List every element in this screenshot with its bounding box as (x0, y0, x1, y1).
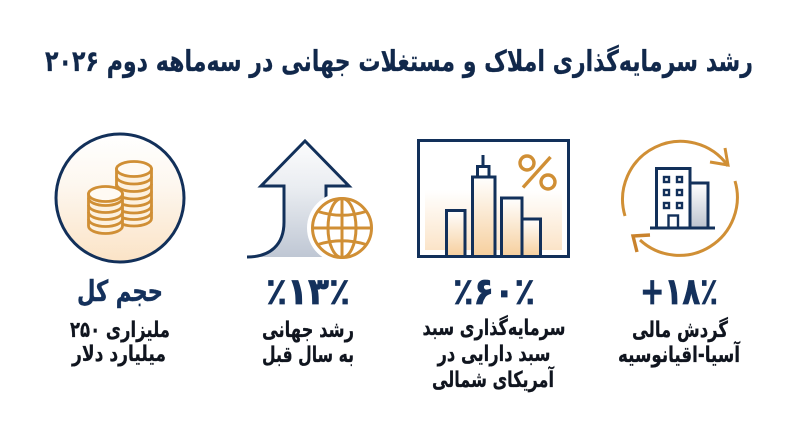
text: total volume description (70, 318, 170, 367)
icon: up arrow with globe (247, 141, 377, 263)
text: total volume description: ملیزاری ۲۵۰ (70, 318, 170, 343)
text: Asia-Pacific description: گردش مالی (632, 316, 728, 343)
icon: coin stacks in circle (56, 134, 184, 262)
stat: 60 percent: ٪۶۰٪ (453, 270, 535, 313)
panel: North America investment (418, 140, 568, 393)
text: North America description: سرمایه‌گذاری سبد (422, 314, 566, 341)
text: global growth description: به سال قبل (262, 343, 354, 368)
stat: plus 18 percent: +۱۸٪ (640, 270, 718, 313)
text: North America description: سبد دارایی در (437, 342, 550, 367)
stat: 13 percent: ٪۱۳٪ (266, 270, 350, 313)
icon: skyline chart with percent (418, 140, 568, 256)
text: Asia-Pacific description: آسیا-اقیانوسیه (618, 340, 740, 368)
text: global growth description: رشد جهانی (262, 318, 354, 343)
panel: total volume (56, 134, 184, 367)
text: North America description: آمریکای شمالی (432, 365, 554, 393)
text: total volume description: میلیارد دلار (71, 342, 166, 367)
icon: building in cycle arrows (623, 141, 737, 255)
text: Asia-Pacific description (618, 316, 740, 368)
text: global growth description (262, 318, 354, 368)
panel: global growth (247, 141, 377, 368)
heading: total volume: حجم کل (77, 274, 163, 308)
text: North America description (422, 314, 566, 393)
panel: Asia-Pacific transactions (618, 141, 740, 368)
